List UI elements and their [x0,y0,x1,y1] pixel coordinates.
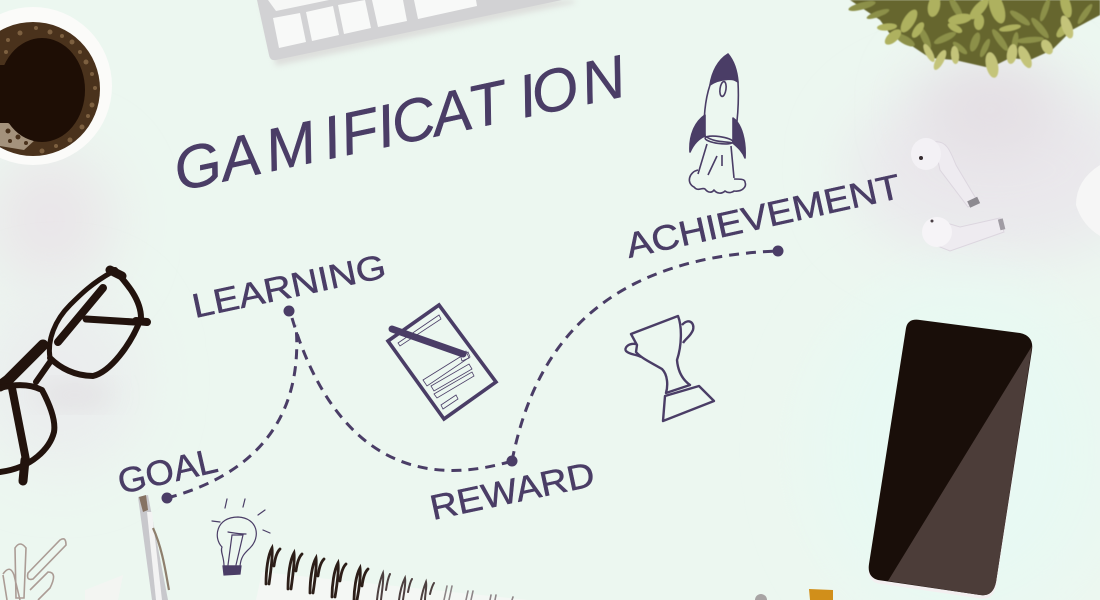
dashed progress path [167,251,778,498]
glasses [0,270,147,481]
waypoint: learning [284,306,294,316]
plant [848,0,1100,79]
rocket icon [689,54,745,193]
label: reward: REWARD [427,455,598,528]
coffee cup [0,7,112,165]
waypoint: achievement [772,246,784,256]
paperclips [3,539,66,600]
clipboard icon [388,305,496,419]
title: Gamification: GAMIFICATION [168,43,632,204]
airpods [911,138,1005,251]
waypoint: goal [162,492,172,504]
pen [138,495,169,600]
yellow marker [755,589,833,600]
airpods case [1076,165,1100,236]
keyboard [257,0,575,66]
notebook [256,548,528,600]
label: learning: LEARNING [189,248,389,326]
label: goal: GOAL [114,441,221,502]
lightbulb icon [212,499,270,575]
label: achievement: ACHIEVEMENT [622,167,904,266]
smartphone [869,320,1032,599]
eraser [85,575,123,600]
waypoint: reward [506,456,518,466]
trophy icon [625,316,714,421]
